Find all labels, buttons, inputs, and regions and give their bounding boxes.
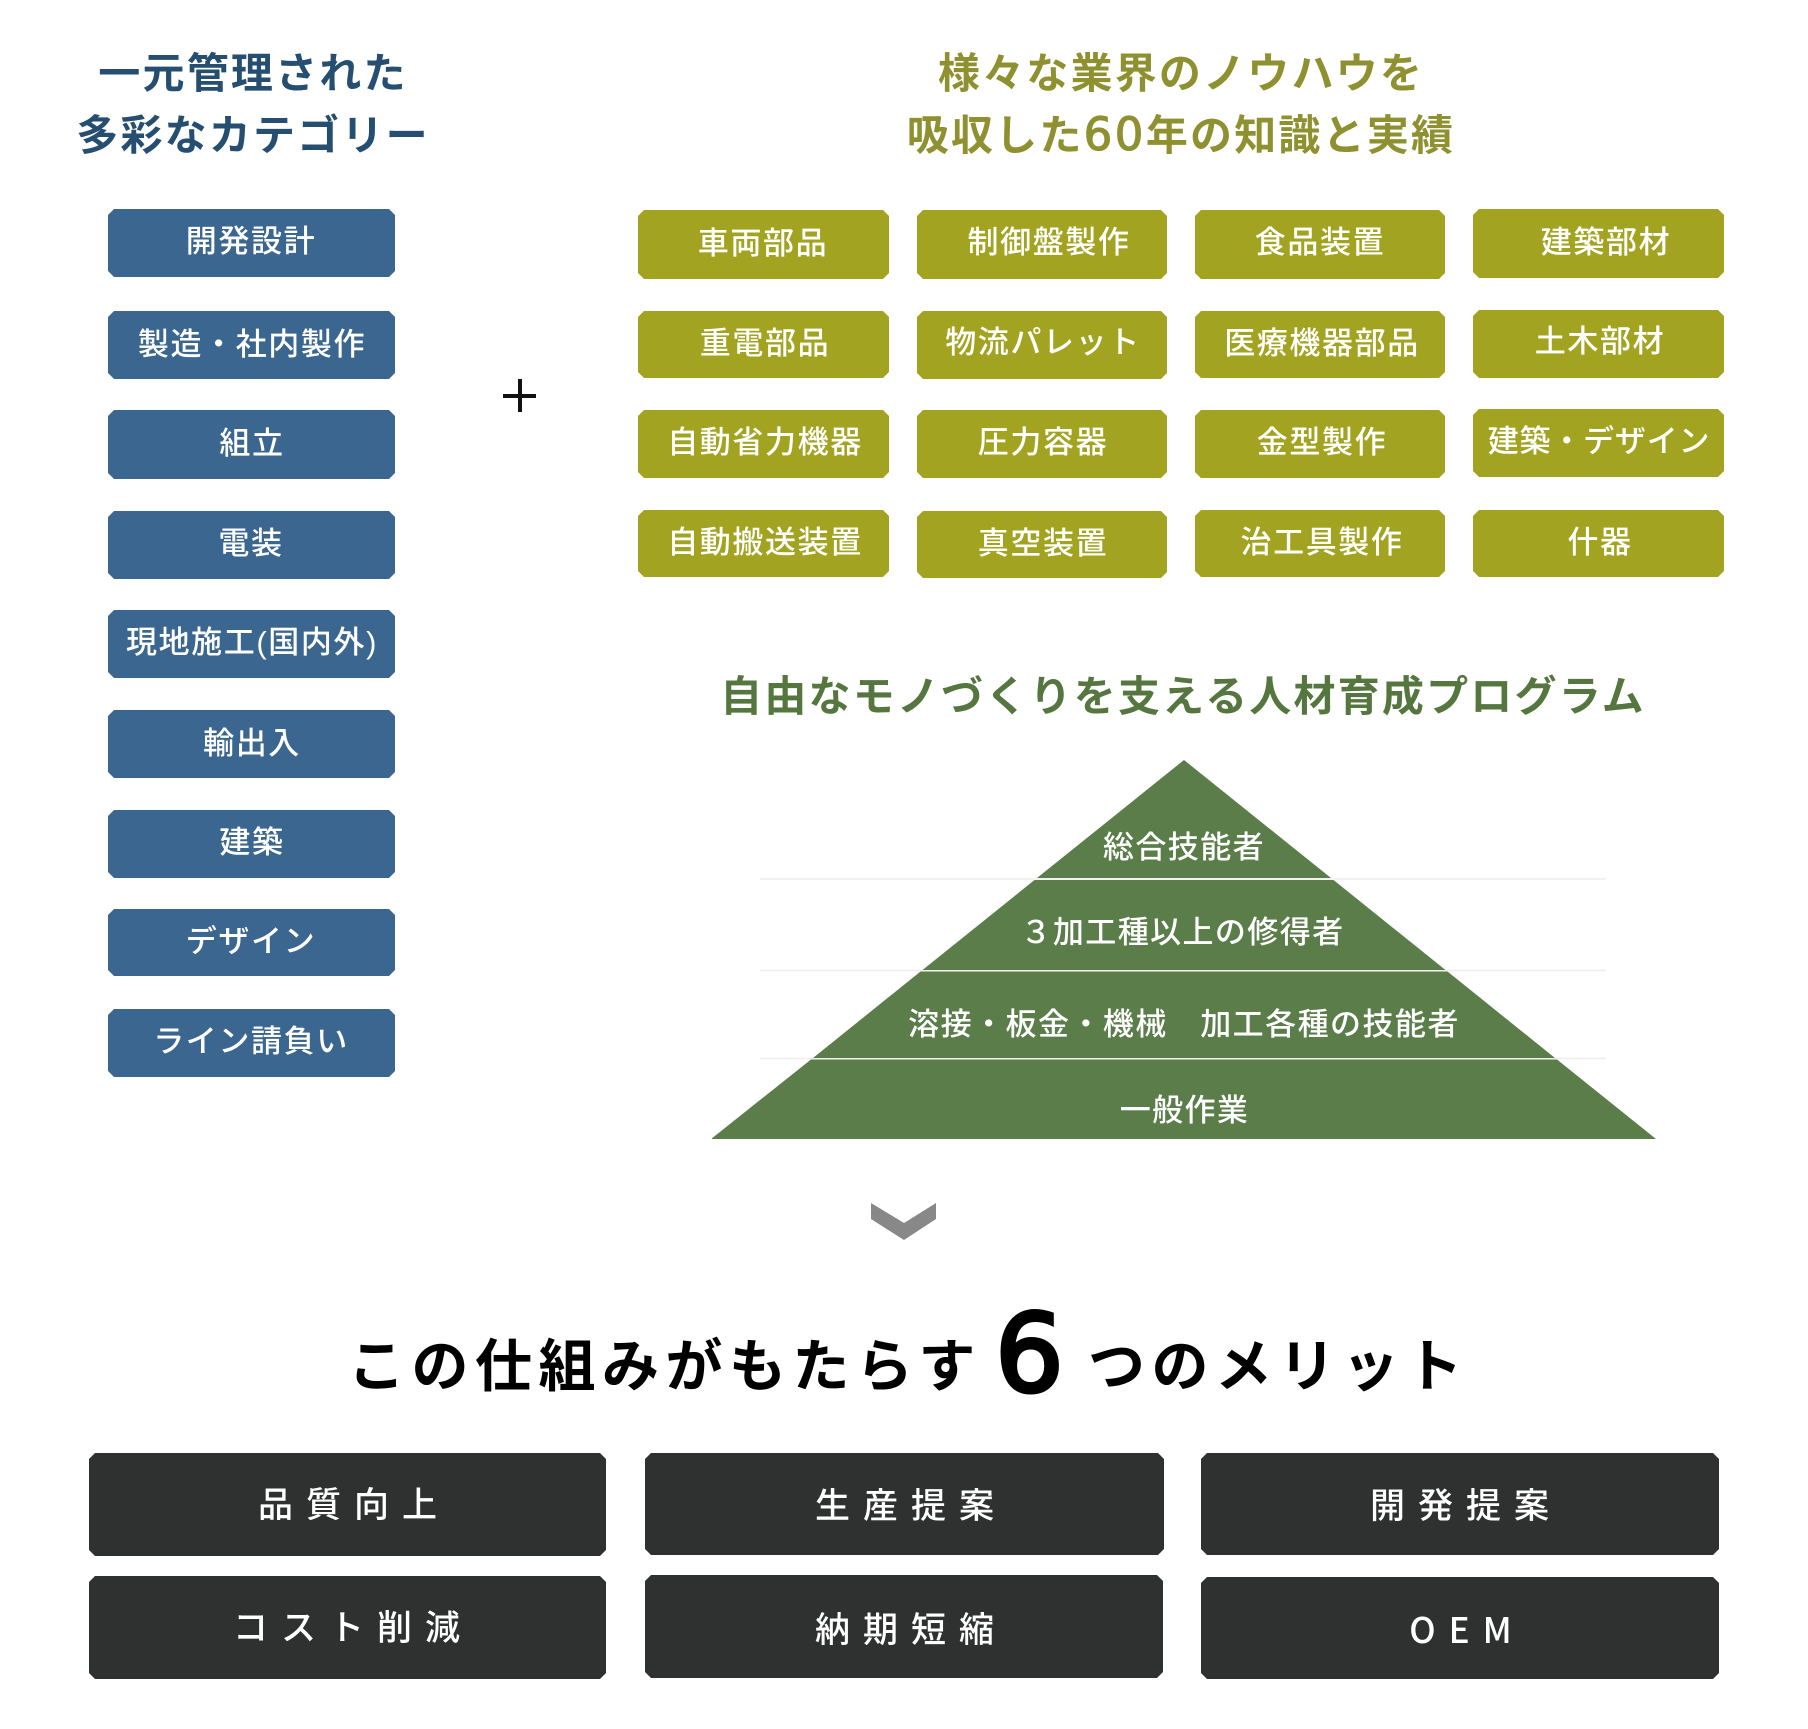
industry: 治工具製作: 治工具製作 [1240,525,1404,560]
category: 電装: 電装 [218,526,284,561]
category: 電装 [108,511,395,579]
industry: 物流パレット [917,311,1167,379]
heading: six merits: つのメリット [1088,1335,1469,1399]
industry: 自動搬送装置 [638,510,889,577]
merit: 生産提案: 生産提案 [815,1487,1007,1526]
industry: 重電部品 [638,311,889,378]
panel: industry grid [638,209,1724,578]
heading: know-how [907,50,1455,161]
industry: 真空装置: 真空装置 [978,526,1108,561]
pyramid tier: 溶接・板金・機械 加工各種の技能者: 溶接・板金・機械 加工各種の技能者 [908,1007,1460,1042]
industry: 車両部品 [638,210,889,279]
industry: 制御盤製作 [917,210,1167,279]
category: 開発設計: 開発設計 [186,224,316,259]
pyramid tier: 一般作業: 一般作業 [1120,1093,1249,1128]
merit: 開発提案: 開発提案 [1370,1487,1562,1526]
merit: 品質向上 [89,1453,606,1556]
industry: 重電部品: 重電部品 [700,326,830,361]
merit: 開発提案 [1201,1453,1719,1555]
industry: 土木部材: 土木部材 [1535,324,1665,359]
industry: 真空装置 [917,511,1167,578]
category: 組立: 組立 [219,426,285,461]
pyramid tier: 溶接・板金・機械 加工各種の技能者 [813,972,1555,1058]
category: 組立 [108,410,395,479]
heading: six merits: この仕組みがもたらす [348,1335,982,1399]
category: 製造・社内製作: 製造・社内製作 [138,327,366,362]
industry: 金型製作: 金型製作 [1257,425,1387,460]
industry: 建築部材: 建築部材 [1541,225,1671,260]
category: 現地施工: 現地施工(国内外) [126,625,378,660]
merit: コスト削減 [89,1576,606,1679]
category: ライン請負い: ライン請負い [153,1024,349,1059]
category: 現地施工 [108,610,395,678]
industry: 医療機器部品 [1195,311,1445,378]
industry: 建築部材 [1473,209,1724,278]
pyramid tier: 3加工種以上の修得者: ３加工種以上の修得者 [1020,915,1344,950]
industry: 建築・デザイン: 建築・デザイン [1488,424,1710,459]
industry: 圧力容器: 圧力容器 [978,425,1108,460]
industry: 金型製作 [1195,410,1445,478]
industry: 什器: 什器 [1567,525,1633,560]
category: 製造・社内製作 [108,311,395,379]
icon: down chevron [871,1203,936,1240]
merit: コスト削減: コスト削減 [233,1609,473,1648]
pyramid tier: 3加工種以上の修得者 [922,880,1446,970]
industry: 土木部材 [1473,310,1724,378]
heading: categories [76,50,430,159]
category: デザイン [108,909,395,976]
merit: OEM [1201,1577,1719,1679]
heading: six merits: 6 [995,1292,1064,1417]
heading: know-how: 吸収した60年の知識と実績 [907,108,1455,161]
chart: skills pyramid [712,760,1656,1139]
category: 輸出入 [108,710,395,778]
panel: category list [108,209,395,1077]
category: 輸出入: 輸出入 [203,726,301,761]
category: ライン請負い [108,1009,395,1077]
industry: 圧力容器 [917,410,1167,478]
merit: OEM: OEM [1409,1602,1525,1654]
heading: know-how: 様々な業界のノウハウを [938,50,1424,97]
industry: 制御盤製作: 制御盤製作 [968,225,1130,260]
pyramid tier: 一般作業 [711,1060,1656,1139]
industry: 建築・デザイン [1473,409,1724,477]
industry: 自動省力機器 [638,410,889,478]
industry: 食品装置 [1195,210,1445,279]
category: 開発設計 [108,209,395,277]
industry: 治工具製作 [1195,510,1445,577]
heading: categories: 一元管理された [98,50,408,97]
panel: merits [89,1453,1719,1679]
pyramid tier: 総合技能者: 総合技能者 [1103,830,1265,865]
industry: 自動省力機器: 自動省力機器 [667,425,863,460]
icon: plus [503,379,536,412]
heading: six merits [348,1292,1469,1417]
merit: 品質向上: 品質向上 [258,1486,450,1525]
merit: 納期短縮 [645,1575,1163,1678]
industry: 車両部品: 車両部品 [698,226,828,261]
category: デザイン: デザイン [186,924,316,959]
industry: 医療機器部品: 医療機器部品 [1224,326,1420,361]
merit: 生産提案 [645,1453,1164,1555]
industry: 食品装置: 食品装置 [1255,225,1385,260]
industry: 物流パレット: 物流パレット [945,325,1141,360]
merit: 納期短縮: 納期短縮 [815,1610,1007,1650]
heading: training program: 自由なモノづくりを支える人材育成プログラム [720,672,1646,720]
pyramid tier: 総合技能者 [1037,760,1331,878]
industry: 自動搬送装置: 自動搬送装置 [667,525,863,560]
category: 建築: 建築 [219,825,285,860]
category: 建築 [108,810,395,878]
industry: 什器 [1473,510,1724,577]
heading: categories: 多彩なカテゴリー [76,112,430,159]
